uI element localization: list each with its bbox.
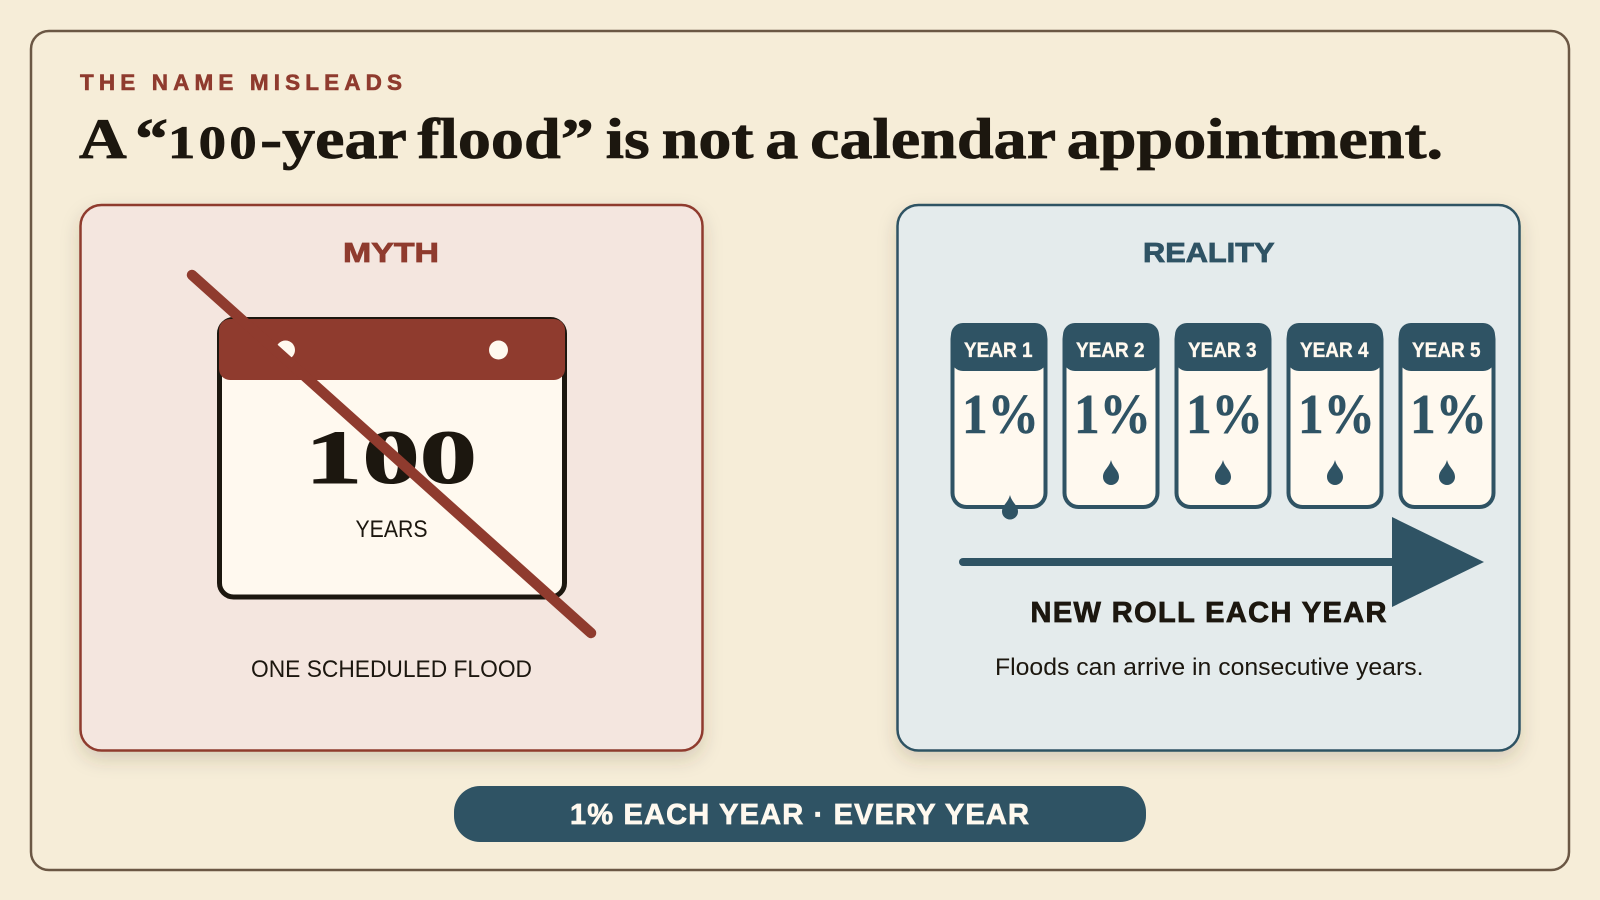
- reality heading: REALITY: [1143, 237, 1275, 268]
- year card 4: 1%: [1298, 384, 1375, 446]
- arrow label: NEW ROLL EACH YEAR: [1030, 597, 1387, 629]
- calendar number: 100: [305, 416, 477, 500]
- calendar header: [219, 319, 565, 380]
- summary pill: 1% EACH YEAR · EVERY YEAR: [570, 799, 1029, 831]
- panel: reality: [898, 205, 1520, 750]
- calendar unit label: YEARS: [356, 516, 428, 543]
- year card 3: YEAR 3: [1188, 339, 1256, 362]
- year card 3: [1175, 323, 1271, 507]
- year card 1: 1%: [962, 384, 1039, 446]
- title: A “ 100-year flood” is not a calendar appointment.: [79, 108, 1443, 171]
- year card 4: YEAR 4: [1300, 339, 1369, 362]
- eyebrow heading: THE NAME MISLEADS: [80, 70, 402, 95]
- icon: calendar: [219, 319, 565, 597]
- myth caption: ONE SCHEDULED FLOOD: [251, 656, 532, 683]
- year card 3: 1%: [1186, 384, 1263, 446]
- calendar hole left: [276, 340, 295, 360]
- panel: myth: [80, 205, 702, 750]
- year card 4: [1287, 323, 1383, 507]
- calendar hole right: [489, 340, 508, 360]
- summary pill: [454, 786, 1146, 842]
- year card 1: [951, 323, 1047, 520]
- calendar page: [220, 320, 564, 597]
- year card 5: YEAR 5: [1412, 339, 1481, 362]
- year card 2: 1%: [1074, 384, 1151, 446]
- myth panel background: [80, 205, 702, 750]
- year card 5: 1%: [1410, 384, 1487, 446]
- arrow: [963, 517, 1484, 607]
- strike-through line: [192, 275, 591, 633]
- year card 1: YEAR 1: [964, 339, 1033, 362]
- year card 2: [1063, 323, 1159, 507]
- reality panel background: [898, 205, 1520, 750]
- reality caption: Floods can arrive in consecutive years.: [995, 654, 1424, 681]
- year card 5: [1399, 323, 1495, 507]
- year card 2: YEAR 2: [1076, 339, 1144, 362]
- myth heading: MYTH: [343, 237, 439, 268]
